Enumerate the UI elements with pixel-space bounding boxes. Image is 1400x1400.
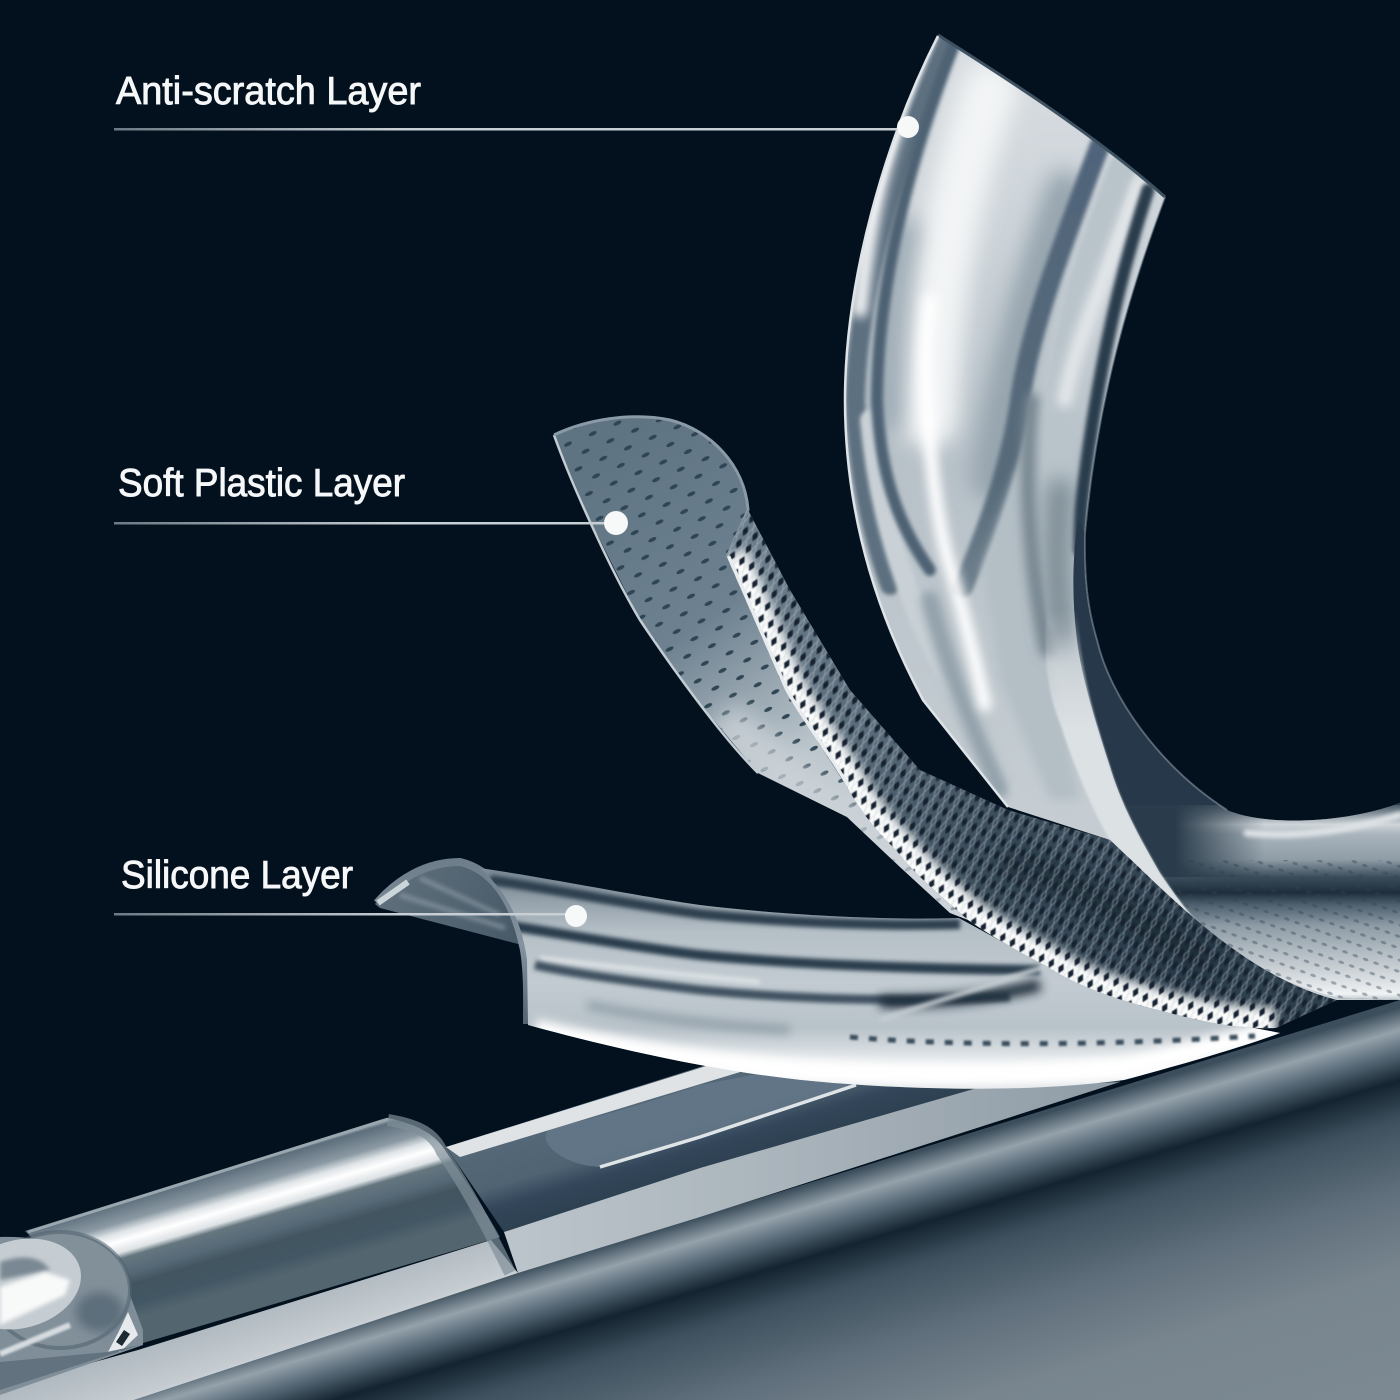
label: anti-scratch layer xyxy=(114,70,919,138)
lens dark streak xyxy=(0,1257,50,1280)
camera surround xyxy=(0,1237,143,1395)
left light strip lower xyxy=(857,408,934,664)
heading: anti-scratch layer: Anti-scratch Layer xyxy=(116,70,421,113)
marker dot xyxy=(604,511,628,535)
front band xyxy=(1045,610,1337,1000)
light strip under sleeve xyxy=(0,1240,518,1400)
mesh top rim xyxy=(554,417,748,557)
label: soft plastic layer xyxy=(114,462,628,535)
lens glint dark xyxy=(116,1330,130,1346)
sleeve top edge line xyxy=(28,1119,388,1232)
grey fade in band e xyxy=(1057,490,1062,640)
left white strip xyxy=(860,125,897,310)
heading: soft plastic layer: Soft Plastic Layer xyxy=(118,462,405,505)
dark band d xyxy=(963,145,1100,587)
white band e xyxy=(1065,186,1140,400)
silicone back flap xyxy=(375,860,522,945)
phone body with bumper xyxy=(0,1000,1400,1400)
ring shadow xyxy=(76,1292,124,1332)
light band e xyxy=(1057,168,1122,620)
silicone flap streaks xyxy=(400,878,505,928)
ribbon left edge xyxy=(845,36,1008,807)
lens lower highlight xyxy=(0,1325,70,1354)
lower grey zone xyxy=(930,600,1000,790)
ribbon right edge xyxy=(1085,197,1227,810)
left rim dark xyxy=(855,40,948,585)
mesh back sheet xyxy=(556,418,968,920)
dark bumper band xyxy=(446,1020,1130,1232)
anti-scratch layer xyxy=(845,35,1400,1005)
ribbon top edge xyxy=(938,35,1165,197)
camera lens xyxy=(0,1225,91,1343)
lower right ribbon section xyxy=(1060,510,1400,1005)
camera ring xyxy=(0,1232,130,1348)
bright centre glow xyxy=(930,90,990,420)
lens white band xyxy=(0,1272,70,1325)
silicone rim arc xyxy=(377,862,527,1024)
silicone layer xyxy=(375,860,1300,1100)
soft plastic layer xyxy=(552,415,1337,1028)
lens bottom band xyxy=(0,1345,140,1390)
light lower panel xyxy=(504,1082,1120,1273)
dark band xyxy=(877,42,955,570)
mesh back edge line xyxy=(554,435,758,773)
leader line xyxy=(114,522,610,524)
marker dot xyxy=(565,905,587,927)
phone back surface xyxy=(134,1000,1400,1400)
clear sleeve xyxy=(25,1118,500,1343)
silicone main strip xyxy=(480,868,1280,1089)
lens glint xyxy=(108,1312,138,1352)
silicone tip highlight xyxy=(378,882,408,903)
recessed slot xyxy=(546,1060,856,1167)
soft grey left of centre xyxy=(888,230,905,420)
mesh front folded sheet xyxy=(727,510,1337,1028)
heading: silicone layer: Silicone Layer xyxy=(121,854,353,897)
label: silicone layer xyxy=(114,854,587,927)
dim inner right rim xyxy=(1080,190,1148,550)
wedge light xyxy=(983,463,1080,800)
leader line xyxy=(114,128,900,130)
leader line xyxy=(114,913,570,916)
grey strip xyxy=(1028,400,1047,650)
centre white streak xyxy=(926,300,985,705)
slot highlight xyxy=(600,1085,856,1167)
sleeve curved edge xyxy=(388,1120,510,1273)
marker dot xyxy=(897,116,919,138)
ribbon base xyxy=(845,35,1400,1000)
ribbon bands xyxy=(855,40,1400,1005)
white top strip xyxy=(446,1048,760,1157)
soft grey right of centre xyxy=(990,190,1065,480)
